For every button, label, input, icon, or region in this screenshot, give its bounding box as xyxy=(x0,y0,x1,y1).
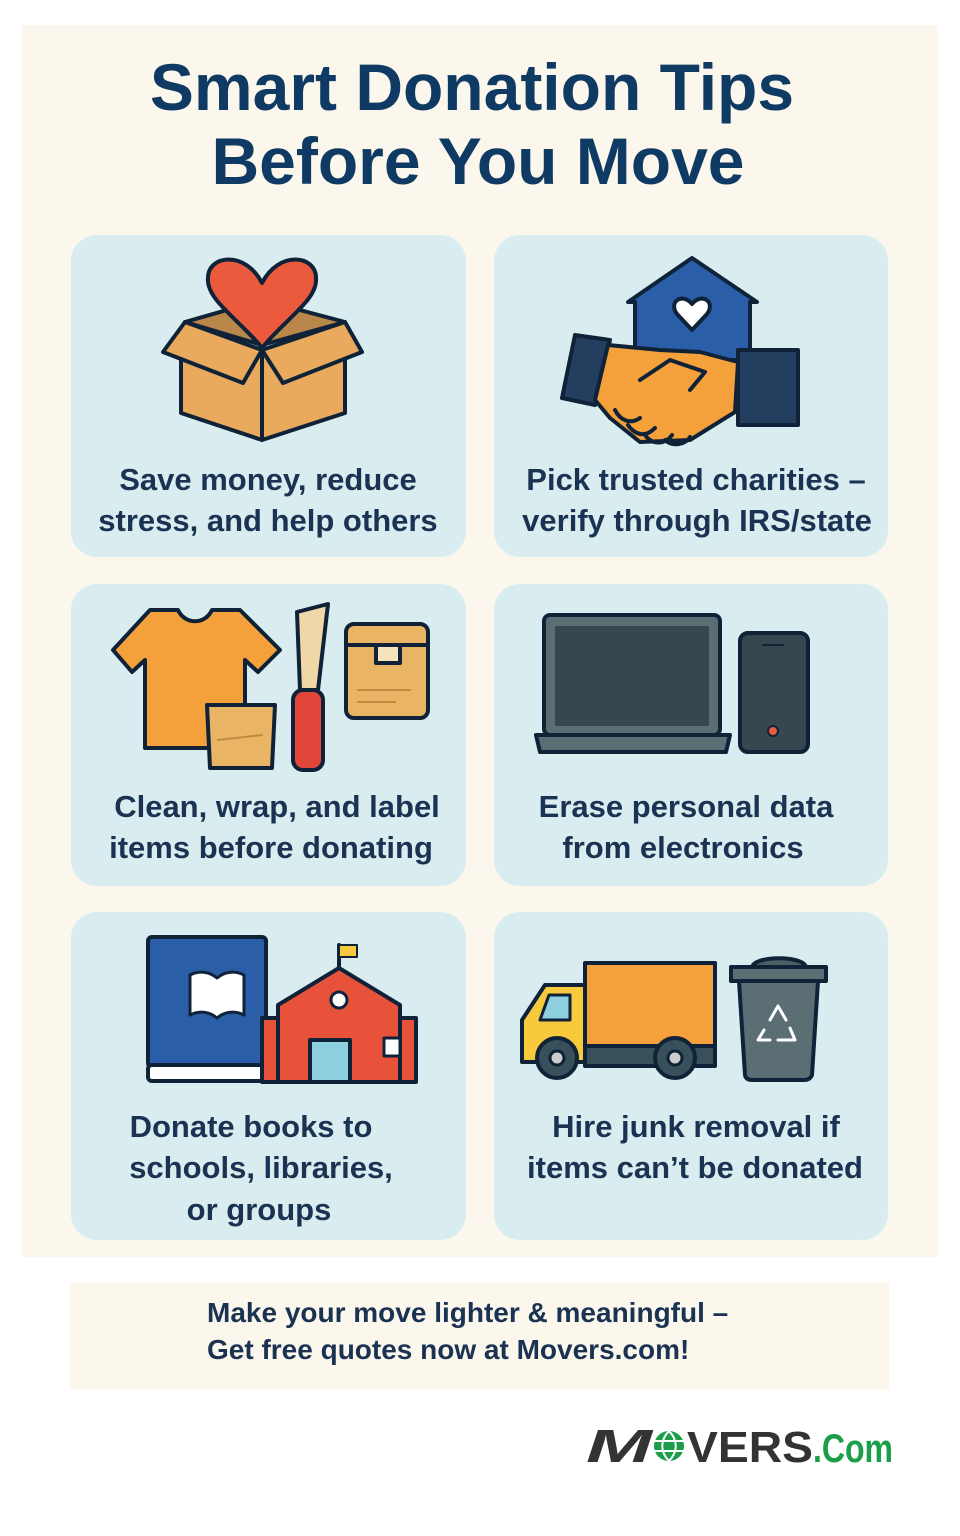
logo: Movers.com xyxy=(586,1420,893,1472)
text: clean wrap: items before donating xyxy=(109,830,433,865)
text: clean wrap: Clean, wrap, and label xyxy=(114,789,440,824)
text: trusted charities xyxy=(522,462,872,538)
callout: footer CTA xyxy=(70,1282,889,1390)
text: clean wrap xyxy=(109,789,440,865)
text: junk removal: Hire junk removal if xyxy=(552,1109,841,1144)
logo: Movers.com: VERS xyxy=(687,1423,813,1472)
text: donate books: schools, libraries, xyxy=(129,1150,393,1185)
panel: donate books xyxy=(71,912,466,1240)
background panel xyxy=(22,25,938,1257)
text: erase data: Erase personal data xyxy=(539,789,834,824)
panel: save money xyxy=(71,235,466,557)
icon: t-shirt, box, knife xyxy=(113,604,428,770)
text: save money: stress, and help others xyxy=(98,503,438,538)
panel: trusted charities xyxy=(494,235,888,557)
icon: truck and bin xyxy=(522,958,826,1080)
panel: erase data xyxy=(494,584,888,886)
text: save money xyxy=(98,462,438,538)
panel: clean wrap label xyxy=(71,584,466,886)
text: junk removal xyxy=(527,1109,863,1185)
title xyxy=(150,50,794,198)
title: Smart Donation Tips xyxy=(150,50,794,124)
icon: house and handshake xyxy=(562,258,798,444)
text: erase data xyxy=(539,789,834,865)
text: trusted charities: verify through IRS/state xyxy=(522,503,872,538)
callout: footer CTA: Make your move lighter & meaningful – xyxy=(207,1297,728,1328)
icon: box with heart xyxy=(163,260,362,440)
text: donate books: or groups xyxy=(187,1192,331,1227)
icon: laptop and phone xyxy=(536,615,808,752)
icon: book and school xyxy=(148,937,416,1082)
text: save money: Save money, reduce xyxy=(119,462,417,497)
text: donate books xyxy=(129,1109,393,1227)
text: erase data: from electronics xyxy=(562,830,804,865)
text: junk removal: items can’t be donated xyxy=(527,1150,863,1185)
logo: Movers.com: M xyxy=(586,1420,655,1472)
panel: junk removal xyxy=(494,912,888,1240)
text: trusted charities: Pick trusted charities – xyxy=(526,462,866,497)
logo: Movers.com: .Com xyxy=(813,1427,893,1471)
callout: footer CTA: Get free quotes now at Movers.com! xyxy=(207,1334,689,1365)
text: donate books: Donate books to xyxy=(130,1109,372,1144)
title: Before You Move xyxy=(212,124,744,198)
